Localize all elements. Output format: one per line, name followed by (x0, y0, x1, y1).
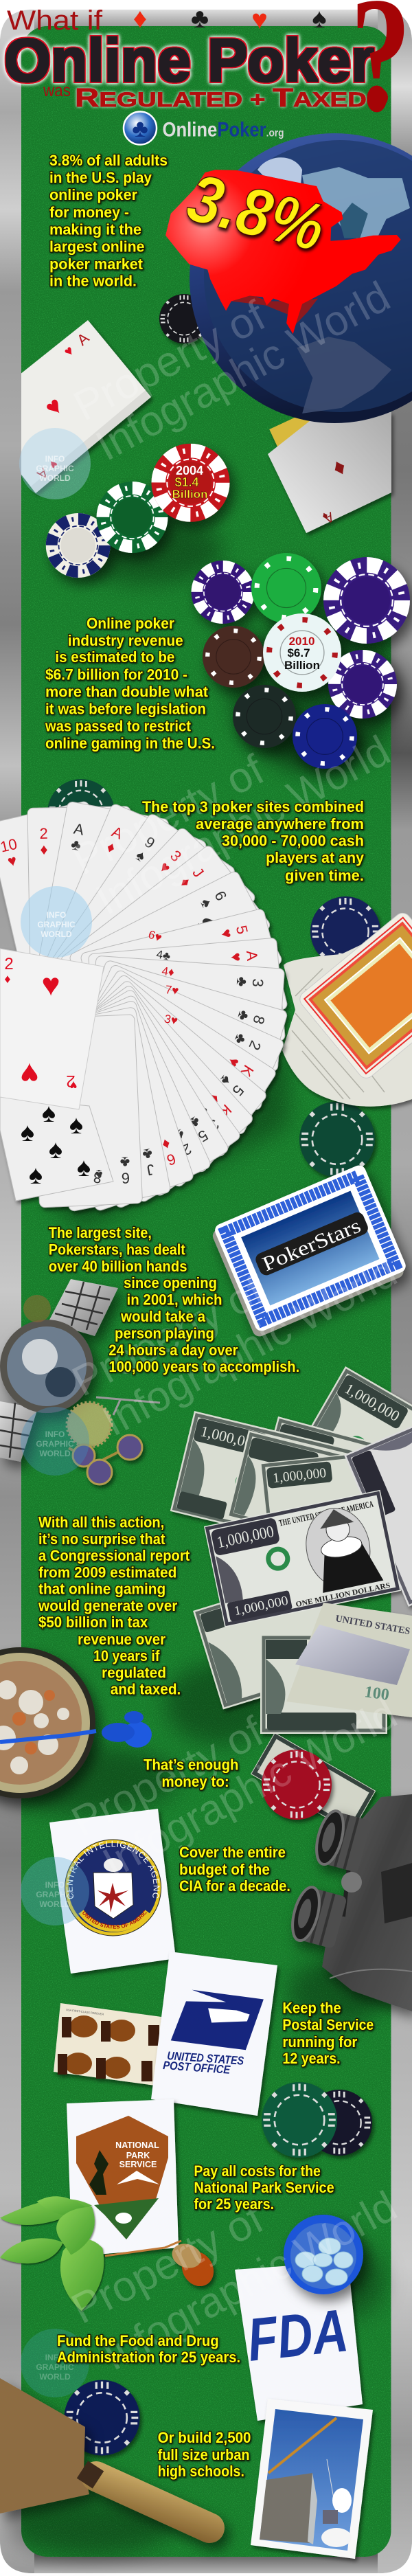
card: eight of spades: ♠ (95, 1166, 102, 1182)
fanned deck of playing cards: K (237, 1062, 258, 1080)
text: 3.8% of adults: making it the (49, 221, 141, 238)
playing card: ace of diamonds, right: A (321, 508, 336, 526)
playing card: ace of diamonds, right (268, 405, 391, 533)
USPS eagle logo (163, 1990, 264, 2077)
fanned deck of playing cards: ♣ (234, 1008, 253, 1023)
text: Congressional report: revenue over (78, 1631, 166, 1648)
text: industry revenue: was passed to restrict (45, 718, 192, 735)
fanned deck of playing cards: ♠ (196, 1103, 213, 1122)
inner set-back card indices: 6♥ (146, 928, 163, 945)
watermark globe logos: GRAPHIC (36, 1890, 74, 1899)
watermark globe logos: WORLD (39, 2372, 71, 2382)
cufflinks (69, 1435, 142, 1484)
text: Congressional report: regulated (102, 1664, 166, 1682)
text: industry revenue: Online poker (87, 615, 174, 632)
text: industry revenue: industry revenue (68, 632, 183, 649)
bill (193, 1572, 348, 1709)
text: 3.8% of adults: poker market (49, 256, 144, 273)
NPS arrowhead badge (76, 2116, 168, 2239)
logo: OnlinePoker.org: OnlinePoker.org (162, 118, 284, 142)
acorn on a twig (105, 2240, 220, 2292)
text: industry revenue: more than double what (45, 683, 209, 700)
text: industry revenue: is estimated to be (55, 648, 174, 666)
watermark globe logos: WORLD (41, 929, 72, 939)
watch parts: gear, spring, hand (23, 1295, 160, 1447)
fanned deck of playing cards: ♠ (197, 896, 216, 911)
chip label: 2004: 2004 (176, 464, 203, 477)
USA map with 3.8%: 3.8% (181, 159, 332, 266)
text: Congressional report: $50 billion in tax (38, 1614, 148, 1631)
fanned deck of playing cards: 2 (179, 1140, 194, 1159)
icons: card suits in header: ♣ (191, 3, 209, 34)
bill (260, 1634, 387, 1734)
card: FDA (235, 2261, 363, 2421)
card: two of hearts: ♦ (4, 972, 11, 986)
card: eight of spades: ♠ (49, 1136, 62, 1164)
card: eight of spades: 8 (92, 1168, 103, 1187)
chip label: 2004: $1.4 (174, 475, 199, 489)
text: industry revenue: online gaming in the U.S. (45, 734, 215, 752)
text: 3.8% of adults: for money - (49, 203, 129, 221)
text: that's enough money: money to: (161, 1773, 229, 1790)
bill: jester million: 1,000,000 (233, 1594, 290, 1618)
text: PokerStars hands: would take a (120, 1308, 206, 1325)
text: FDA: Administration for 25 years. (57, 2349, 240, 2366)
deck of cards with orange back (282, 910, 412, 1107)
text: 3.8% of adults: in the world. (49, 272, 137, 290)
fanned deck of playing cards: A (109, 823, 126, 843)
card: eight of spades: ♠ (77, 1153, 91, 1182)
NPS arrowhead badge: SERVICE (119, 2160, 157, 2169)
text: Congressional report: a Congressional report (38, 1547, 190, 1564)
watermark: Property of Infographic World: Infographic World (95, 1248, 404, 1445)
NPS arrowhead badge: NATIONAL (115, 2140, 159, 2150)
fanned deck of playing cards: ♦ (40, 841, 48, 858)
fanned deck of playing cards: 5 (195, 1127, 211, 1146)
text: industry revenue (45, 615, 215, 752)
text: top 3 poker sites: given time. (285, 867, 364, 884)
hundred dollar bill under clip: UNITED STATES (334, 1614, 411, 1637)
playing card: ace of diamonds, right: ♦ (320, 510, 330, 523)
text: National Park Service: for 25 years. (194, 2195, 274, 2213)
card: eight of spades: ♠ (69, 1111, 83, 1140)
card: National Park Service (67, 2099, 179, 2257)
fanned deck of playing cards: 2 (39, 825, 48, 842)
fanned deck of playing cards: ♠ (217, 1072, 236, 1089)
globe with continents (190, 133, 412, 423)
bill: jester million (204, 1490, 401, 1627)
title: What if (7, 5, 103, 36)
watermark: Property of Infographic World: Infographic World (89, 273, 398, 470)
playing cards: pair of aces, top left: A (73, 329, 93, 349)
watermark: Property of Infographic World: Property of (67, 292, 273, 430)
text: Congressional report: 10 years if (93, 1647, 160, 1664)
chips: 2010 revenue pile (191, 553, 410, 769)
text: Congressional report: it’s no surprise that (38, 1530, 165, 1548)
card: eight of spades: ♠ (29, 1161, 43, 1190)
watermark globe logos: INFO (45, 1430, 65, 1439)
text: high schools (158, 2429, 251, 2480)
text: high schools: Or build 2,500 (158, 2429, 251, 2446)
brand name: PokerStars (259, 1214, 364, 1276)
title: R EGULATED + TAXED (75, 84, 367, 113)
fanned deck of playing cards: A (72, 820, 86, 839)
text: National Park Service: Pay all costs for the (194, 2162, 321, 2180)
card: two of hearts: 2 (4, 955, 14, 973)
title (4, 0, 411, 146)
broken wrist watch (0, 1279, 118, 1462)
watermark globe logos (19, 428, 92, 2397)
icons: card suits in header: ♦ (133, 3, 147, 34)
hundred dollar bill under clip: 100 (363, 1683, 390, 1704)
bill (251, 1732, 376, 1833)
USPS eagle logo: POST OFFICE (163, 2059, 231, 2077)
watermark globe logos: INFO (45, 1880, 65, 1890)
text: high schools: full size urban (158, 2446, 250, 2463)
card: eight of spades: ♠ (42, 1099, 56, 1128)
text: PokerStars hands: in 2001, which (126, 1291, 222, 1309)
CIA seal (65, 1840, 162, 1936)
chip: dark green lower (299, 1102, 375, 1177)
playing cards: pair of aces, top left: ♥ (46, 457, 60, 472)
fanned deck of playing cards: ♣ (119, 1153, 130, 1171)
logo: OnlinePoker.org: ♣ (132, 114, 148, 142)
text: National Park Service: National Park Service (194, 2179, 334, 2196)
fanned deck of playing cards: ♠ (133, 846, 149, 865)
fanned deck of playing cards: ♥ (207, 945, 247, 971)
text: Congressional report: from 2009 estimated (38, 1564, 176, 1581)
fanned deck of playing cards: 3 (249, 978, 266, 988)
text: Postal Service (282, 1999, 374, 2067)
fanned deck of playing cards: ♠ (139, 857, 168, 890)
bill: 1,000,000 (272, 1465, 327, 1486)
watermark globe logos: INFO (45, 2353, 65, 2362)
fanned deck of playing cards: 3 (205, 1116, 222, 1134)
text: 3.8% of adults: 3.8% of all adults (49, 152, 168, 169)
fanned deck of playing cards: 5 (233, 923, 251, 936)
binoculars (288, 1794, 412, 2011)
bill (301, 1366, 412, 1533)
black poker chip (159, 294, 209, 343)
text: 3.8% of adults (49, 152, 168, 290)
fanned deck of playing cards: ♣ (186, 1113, 203, 1133)
pill bottle with pills (284, 2215, 363, 2294)
chip label: 2004 (172, 464, 207, 501)
chip label: 2010: $6.7 (287, 646, 310, 659)
watermark globe logos: WORLD (39, 1899, 71, 1909)
watermark globe logos: WORLD (39, 1449, 71, 1458)
fanned deck of playing cards: 8 (249, 1013, 268, 1026)
watermark globe logos: GRAPHIC (36, 1439, 74, 1449)
card: two of hearts: ♥ (41, 967, 60, 1002)
text: industry revenue: $6.7 billion for 2010 - (45, 666, 187, 683)
text: PokerStars hands (49, 1224, 299, 1375)
logo: OnlinePoker.org (124, 111, 284, 144)
fanned deck of playing cards: 3 (167, 847, 185, 865)
playing cards: pair of aces, top left: ♥ (39, 391, 69, 422)
text: top 3 poker sites: players at any (266, 849, 365, 866)
text: top 3 poker sites: average anywhere from (196, 815, 364, 833)
USPS eagle logo: UNITED STATES (167, 2049, 244, 2068)
playing cards: pair of aces, top left: A (34, 464, 51, 482)
postage stamps (54, 2003, 161, 2086)
table shadows under objects (0, 515, 402, 2555)
drink glass with ice (0, 1647, 95, 1798)
watermark: Property of Infographic World: Property of (65, 746, 272, 884)
fanned deck of playing cards: ♠ (173, 1125, 187, 1144)
watermark globe logos: INFO (45, 454, 65, 464)
inner set-back card indices: 7♥ (165, 983, 179, 997)
fanned deck of playing cards: J (145, 1161, 156, 1179)
text: Congressional report: would generate over (38, 1597, 178, 1614)
fanned deck of playing cards: ♥ (227, 952, 245, 962)
card: US Post Office (151, 1952, 277, 2116)
text: Postal Service: 12 years. (282, 2050, 341, 2067)
chip label: 2010: Billion (284, 659, 320, 672)
card: CIA (49, 1809, 179, 1978)
fanned deck of playing cards: ♥ (30, 853, 56, 890)
card: eight of spades (0, 1097, 113, 1201)
text: high schools: high schools. (158, 2463, 244, 2480)
text: National Park Service (194, 2162, 334, 2213)
text: that's enough money: That’s enough (144, 1756, 239, 1774)
icons: card suits in header: ♥ (251, 5, 268, 35)
fanned deck of playing cards: 2 (246, 1038, 264, 1053)
chip label: 2004: Billion (172, 488, 207, 501)
text: Postal Service: Keep the (282, 1999, 341, 2017)
NPS arrowhead badge: PARK (126, 2151, 150, 2160)
text: PokerStars hands: Pokerstars, has dealt (49, 1241, 185, 1258)
chip label: 2010 (284, 635, 320, 672)
chip label: 2010: 2010 (289, 635, 314, 648)
card: eight of spades: ♠ (21, 1118, 34, 1147)
watermark: Property of Infographic World: Property of (65, 2195, 271, 2333)
text: Postal Service: Postal Service (282, 2016, 374, 2033)
bill (255, 1416, 411, 1538)
bill: 1,000,000 (342, 1379, 403, 1425)
text: CIA: Cover the entire (179, 1844, 286, 1861)
playing cards: pair of aces, top left: ♥ (61, 343, 77, 360)
fanned deck of playing cards: ♣ (69, 835, 82, 854)
text: PokerStars hands: over 40 billion hands (49, 1258, 187, 1275)
USA map with 3.8% (165, 159, 401, 334)
text: PokerStars hands: since opening (124, 1274, 217, 1291)
stack of million dollar bills (170, 1366, 412, 1833)
inner set-back card indices: 3♥ (163, 1012, 179, 1028)
fanned deck of playing cards: 6 (165, 1150, 178, 1169)
bill: 1,000,000 (199, 1422, 262, 1453)
text: 3.8% of adults: online poker (49, 186, 137, 203)
text: top 3 poker sites: The top 3 poker sites combined (142, 798, 364, 815)
fanned deck of playing cards: ♦ (104, 838, 118, 857)
text: Congressional report: With all this action, (38, 1514, 164, 1531)
chip: navy (310, 896, 380, 967)
text: PokerStars hands: 100,000 years to accomplish. (108, 1358, 299, 1375)
text: top 3 poker sites (142, 798, 365, 884)
fanned deck of playing cards: ♦ (176, 874, 195, 890)
watermark: Property of Infographic World: Property of (65, 1708, 271, 1846)
text: PokerStars hands: 24 hours a day over (108, 1342, 238, 1359)
bill: jester million: 1,000,000 (216, 1523, 275, 1552)
chip: dark green (47, 779, 115, 846)
PokerStars card deck (211, 1163, 408, 1339)
watermark: Property of Infographic World: Infographic World (95, 1690, 404, 1887)
bill: jester million: ONE MILLION DOLLARS (295, 1581, 391, 1609)
chip: red (262, 1750, 332, 1820)
bill (260, 1452, 371, 1538)
text: 3.8% of adults: in the U.S. play (49, 169, 152, 186)
text: PokerStars hands: person playing (115, 1325, 214, 1342)
silver money clip (295, 1625, 410, 1685)
watermark globe logos: GRAPHIC (37, 920, 76, 929)
CIA seal: CENTRAL INTELLIGENCE AGENCY (66, 1841, 159, 1899)
title: Online Poker (4, 26, 374, 94)
watermark globe logos: GRAPHIC (36, 464, 74, 473)
playing card: ace of diamonds, right: ♦ (328, 453, 350, 482)
text: Congressional report (38, 1514, 190, 1698)
text: CIA (179, 1844, 290, 1895)
fanned deck of playing cards: ♥ (217, 927, 236, 940)
trowel (0, 2378, 209, 2528)
fanned deck of playing cards: J (189, 864, 207, 881)
inner set-back card indices (146, 928, 179, 1028)
text: that's enough money (144, 1756, 239, 1790)
watermark: Property of Infographic World: Infographic World (95, 2182, 404, 2380)
text: Congressional report: and taxed. (111, 1680, 181, 1698)
fanned deck of playing cards: ♣ (233, 976, 251, 987)
card: two of hearts: 2 (66, 1072, 76, 1090)
fanned deck of playing cards: A (243, 950, 261, 962)
text: industry revenue: it was before legislation (45, 701, 206, 717)
bill (344, 1385, 412, 1607)
fanned deck of playing cards: 6 (121, 1169, 130, 1187)
fanned deck of playing cards: 5 (229, 1082, 247, 1099)
text: top 3 poker sites: 30,000 - 70,000 cash (222, 833, 364, 850)
text: CIA: CIA for a decade. (179, 1877, 290, 1895)
watermark globe logos: WORLD (39, 473, 71, 483)
fanned deck of playing cards: 6 (211, 888, 230, 903)
inner set-back card indices: 4♦ (161, 964, 175, 979)
bill (170, 1411, 354, 1550)
fanned deck of playing cards: ♥ (6, 851, 19, 870)
fanned deck of playing cards: K (216, 1101, 235, 1120)
fanned deck of playing cards: ♦ (206, 1090, 223, 1108)
icons: card suits in header (133, 3, 327, 35)
watermark globe logos: INFO (47, 910, 66, 920)
fanned deck of playing cards: ♠ (191, 908, 231, 940)
photo: construction site (251, 2399, 373, 2559)
card: two of hearts: ♥ (70, 1078, 77, 1092)
text: PokerStars hands: The largest site, (49, 1224, 152, 1241)
playing cards: pair of aces, top left (21, 320, 154, 497)
chips: 2004 revenue stack (46, 444, 229, 578)
fanned deck of playing cards: ♥ (156, 858, 174, 877)
fanned deck of playing cards: ♦ (160, 1136, 172, 1154)
text: CIA: budget of the (179, 1861, 270, 1878)
hundred dollar bill under clip (286, 1603, 412, 1717)
CIA seal: UNITED STATES OF AMERICA (82, 1910, 147, 1929)
watermark: Property of Infographic World (65, 273, 404, 2380)
card: FDA: FDA (244, 2296, 351, 2374)
text: 3.8% of adults: largest online (49, 238, 144, 256)
watermark globe logos: GRAPHIC (36, 2362, 74, 2372)
text: FDA: Fund the Food and Drug (57, 2332, 219, 2349)
watermark: Property of Infographic World: Property of (65, 1267, 272, 1405)
fanned deck of playing cards (0, 801, 288, 1212)
fanned deck of playing cards: ♣ (141, 1145, 154, 1164)
bill (227, 1430, 395, 1553)
text: Postal Service: running for (282, 2033, 358, 2050)
title: was (43, 81, 71, 100)
fanned deck of playing cards: ♣ (231, 1031, 251, 1047)
icons: card suits in header: ♠ (312, 3, 327, 34)
green mint leaves (0, 2196, 104, 2311)
fanned deck of playing cards: ♥ (225, 1054, 244, 1071)
chips: green and black pair (262, 2082, 372, 2158)
card: two of hearts: ♥ (20, 1057, 39, 1092)
card: two of hearts (0, 949, 104, 1109)
fanned deck of playing cards: 9 (141, 833, 158, 852)
text: Congressional report: that online gaming (38, 1581, 165, 1598)
text: FDA (57, 2332, 240, 2366)
postage stamps: USA FIRST-CLASS FOREVER (66, 2008, 104, 2016)
chip: navy, bottom (65, 2380, 140, 2456)
inner set-back card indices: 4♣ (155, 947, 172, 963)
watermark: Property of Infographic World: Infographic World (89, 727, 398, 924)
blue stir stick (0, 1711, 152, 1748)
